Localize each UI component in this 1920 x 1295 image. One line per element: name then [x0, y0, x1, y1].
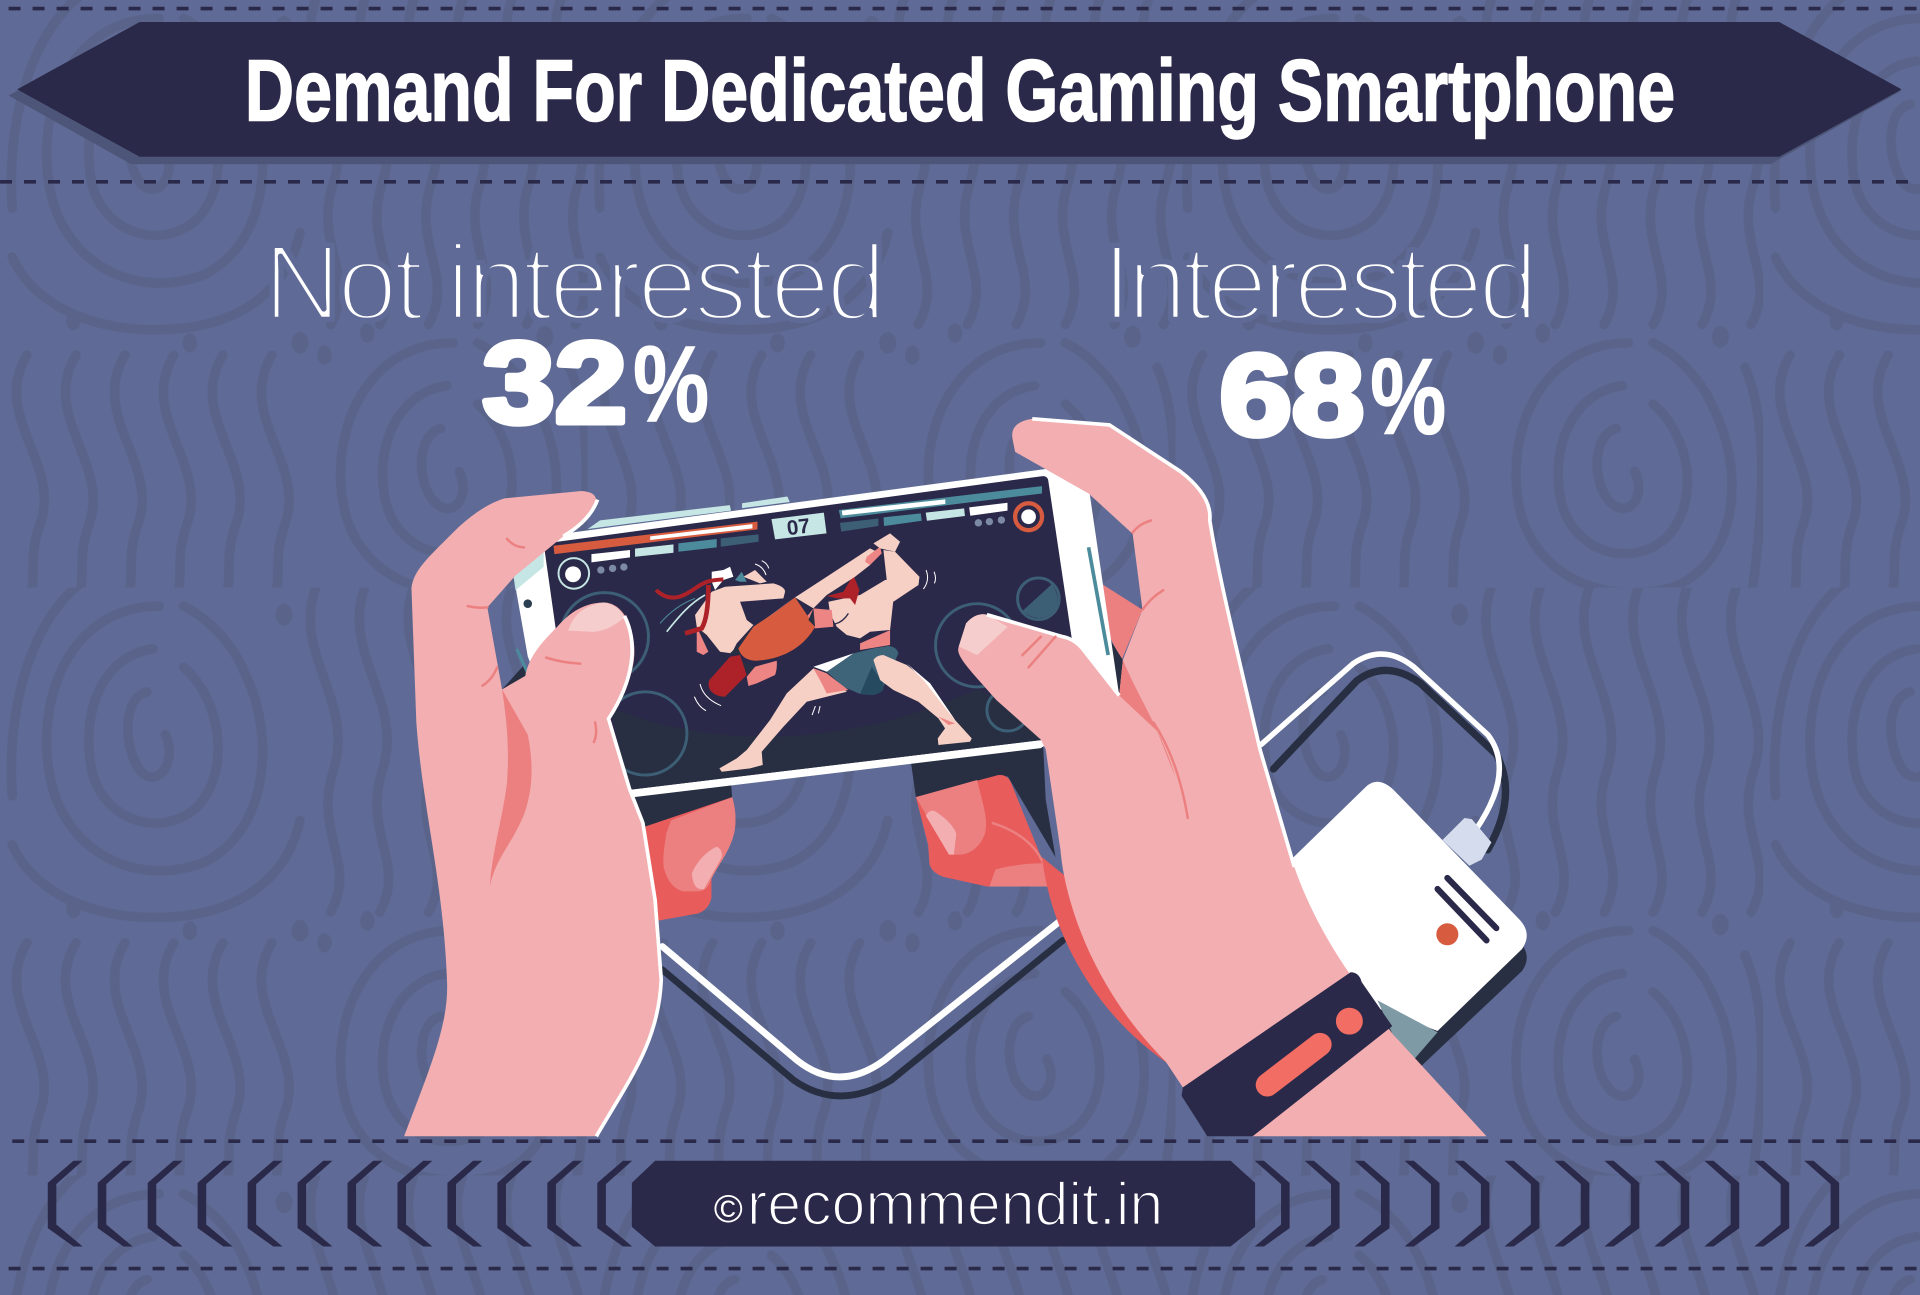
jumping fighter: [656, 533, 900, 697]
right timer ring: [1015, 503, 1042, 530]
outline highlights: [987, 419, 1294, 867]
charging cable top loop: [1261, 654, 1506, 850]
thumbnail: [568, 602, 624, 632]
phone back: [502, 664, 528, 735]
power bank led: [1436, 923, 1458, 945]
footer chevrons left: [48, 1161, 632, 1247]
stat: not interested: Not interested: [263, 222, 883, 343]
screen: [544, 476, 1086, 795]
outline highlights: [596, 616, 661, 1136]
joystick circles: [560, 578, 1059, 775]
left hand: [404, 491, 661, 1136]
left timer ring: [558, 558, 589, 589]
right hand: [958, 419, 1487, 1136]
charging cable bottom loop: [662, 921, 1063, 1096]
stat: interested: [1102, 222, 1533, 460]
band dot: [1336, 1008, 1363, 1035]
thumbnail: [959, 614, 1008, 655]
ground: [610, 689, 1086, 790]
smartphone: [502, 467, 1119, 797]
footer banner: [632, 1161, 1255, 1247]
camera: [523, 599, 532, 608]
score badge: [771, 513, 827, 540]
value 68: 68: [1220, 332, 1364, 460]
title banner: [9, 22, 1902, 164]
left health bar: [553, 522, 759, 574]
footer credit: recommendit.in: [747, 1170, 1163, 1237]
stat: not interested: [263, 222, 883, 447]
creases: [468, 539, 596, 742]
right health bar: [839, 486, 1042, 532]
motion lines: [694, 561, 935, 715]
creases: [1022, 520, 1188, 818]
value 32: 32: [482, 319, 627, 447]
footer chevrons right: [1255, 1161, 1839, 1247]
percent sign: %: [1370, 335, 1446, 456]
percent sign: %: [633, 323, 709, 444]
palm shading: [490, 689, 532, 887]
wedge behind right side of phone: [1089, 576, 1142, 698]
side buttons: [588, 505, 731, 529]
fingers behind phone: right: [911, 747, 1056, 887]
power bank: [1273, 782, 1527, 1073]
phone body: [513, 467, 1119, 797]
fingers behind phone: left: [634, 784, 736, 921]
wristband: [1182, 972, 1392, 1136]
copyright mark: ©: [714, 1188, 743, 1231]
score badge: 07: [786, 515, 811, 540]
power bank stripes: [1438, 878, 1496, 940]
band pill: [1267, 1044, 1320, 1085]
standing fighter: [719, 550, 972, 772]
red palm edge on right hand: [1042, 857, 1183, 1063]
palm shading: [1119, 660, 1176, 778]
stat: interested: Interested: [1102, 222, 1533, 343]
fighters: [656, 533, 972, 772]
plug: [1442, 818, 1491, 866]
